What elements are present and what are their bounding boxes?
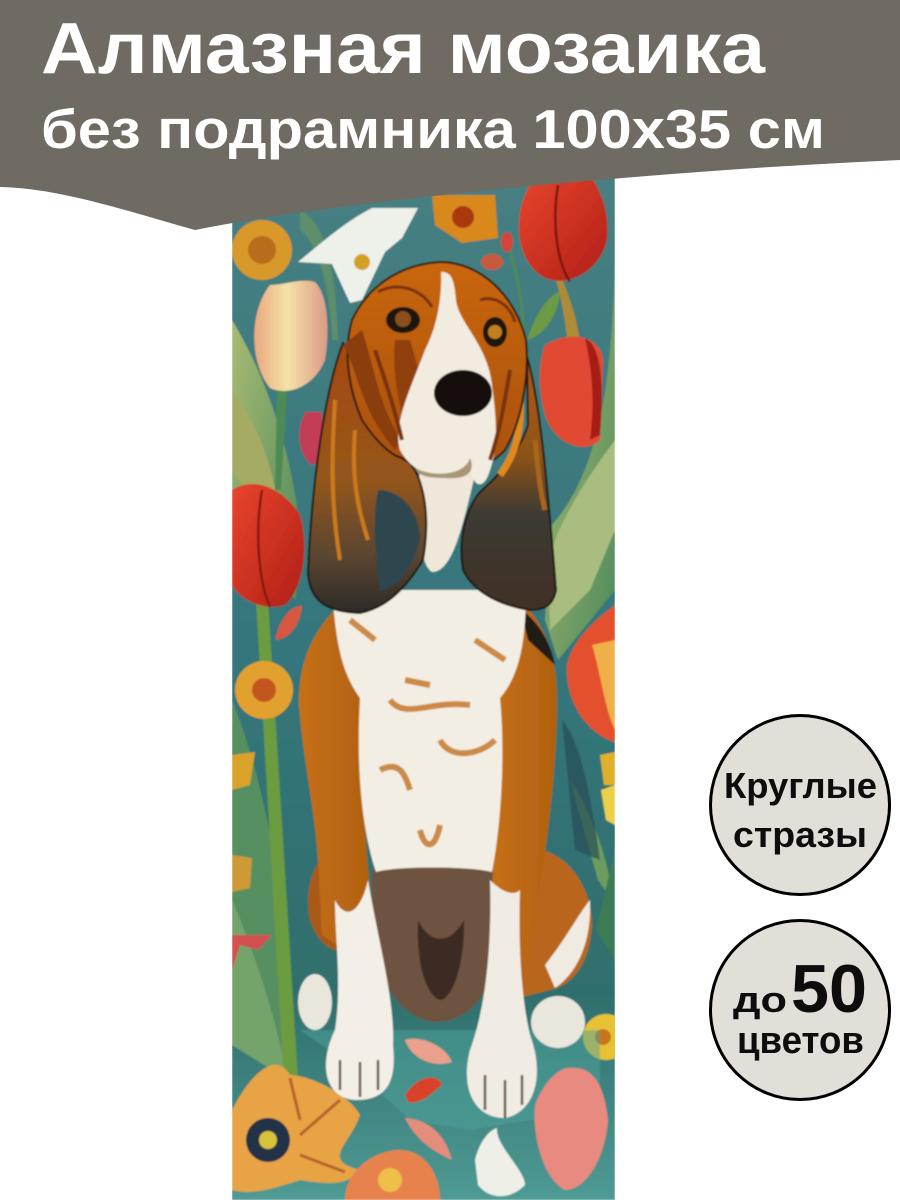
dog: left upper leg	[299, 605, 372, 950]
dog: left ear	[308, 343, 426, 613]
title: Алмазная мозаика	[41, 9, 766, 89]
dog: right upper leg	[492, 605, 557, 960]
tulip: bottom right pink	[535, 1068, 608, 1190]
dog: right foreleg	[467, 880, 537, 1118]
petals on the ground	[405, 1039, 525, 1196]
header banner	[0, 0, 900, 230]
yellow rose and white lily at the top	[232, 195, 498, 303]
dog: left foreleg	[326, 880, 394, 1100]
tulip: right red	[540, 337, 603, 447]
subtitle: без подрамника 100х35 см	[41, 98, 825, 160]
ground pool	[300, 1030, 600, 1130]
dog: right haunch	[520, 850, 594, 998]
tulip: upper left pale	[254, 281, 328, 490]
dog: left haunch	[306, 863, 338, 952]
painting: basset hound among tulips	[232, 170, 629, 1200]
dog: right ear	[461, 357, 556, 610]
dog: belly shadow	[372, 864, 495, 1022]
tulip: right orange-red	[567, 605, 615, 742]
badge: round rhinestones: Круглые	[724, 765, 877, 806]
badge: up to 50 colours: цветов	[737, 1020, 864, 1062]
badge: up to 50 colours: до	[733, 979, 787, 1020]
bud and stem upper right	[481, 232, 560, 350]
orange flowers bottom left	[232, 1065, 440, 1200]
dog: chest white	[332, 590, 526, 872]
dog: neck	[418, 470, 476, 572]
dog: right shoulder shadow	[524, 612, 556, 665]
dog: back paws	[298, 974, 332, 1030]
yellow flowers left	[232, 661, 293, 970]
badge: up to 50 colours: 50	[791, 951, 867, 1027]
tulip: left tall red	[232, 484, 304, 1082]
badge: round rhinestones	[710, 716, 890, 894]
tulip: top right red	[519, 175, 608, 345]
dog: toes	[340, 1060, 522, 1118]
dog: body	[298, 590, 592, 1118]
tulip: small pink	[299, 412, 322, 465]
badge: round rhinestones: стразы	[733, 814, 867, 855]
dog: head	[343, 262, 527, 484]
dog: nose	[434, 370, 492, 416]
badge: up to 50 colours	[710, 920, 890, 1100]
background leaves	[232, 210, 615, 1080]
yellow flowers right	[582, 750, 615, 1062]
dog: eyes	[386, 307, 420, 333]
